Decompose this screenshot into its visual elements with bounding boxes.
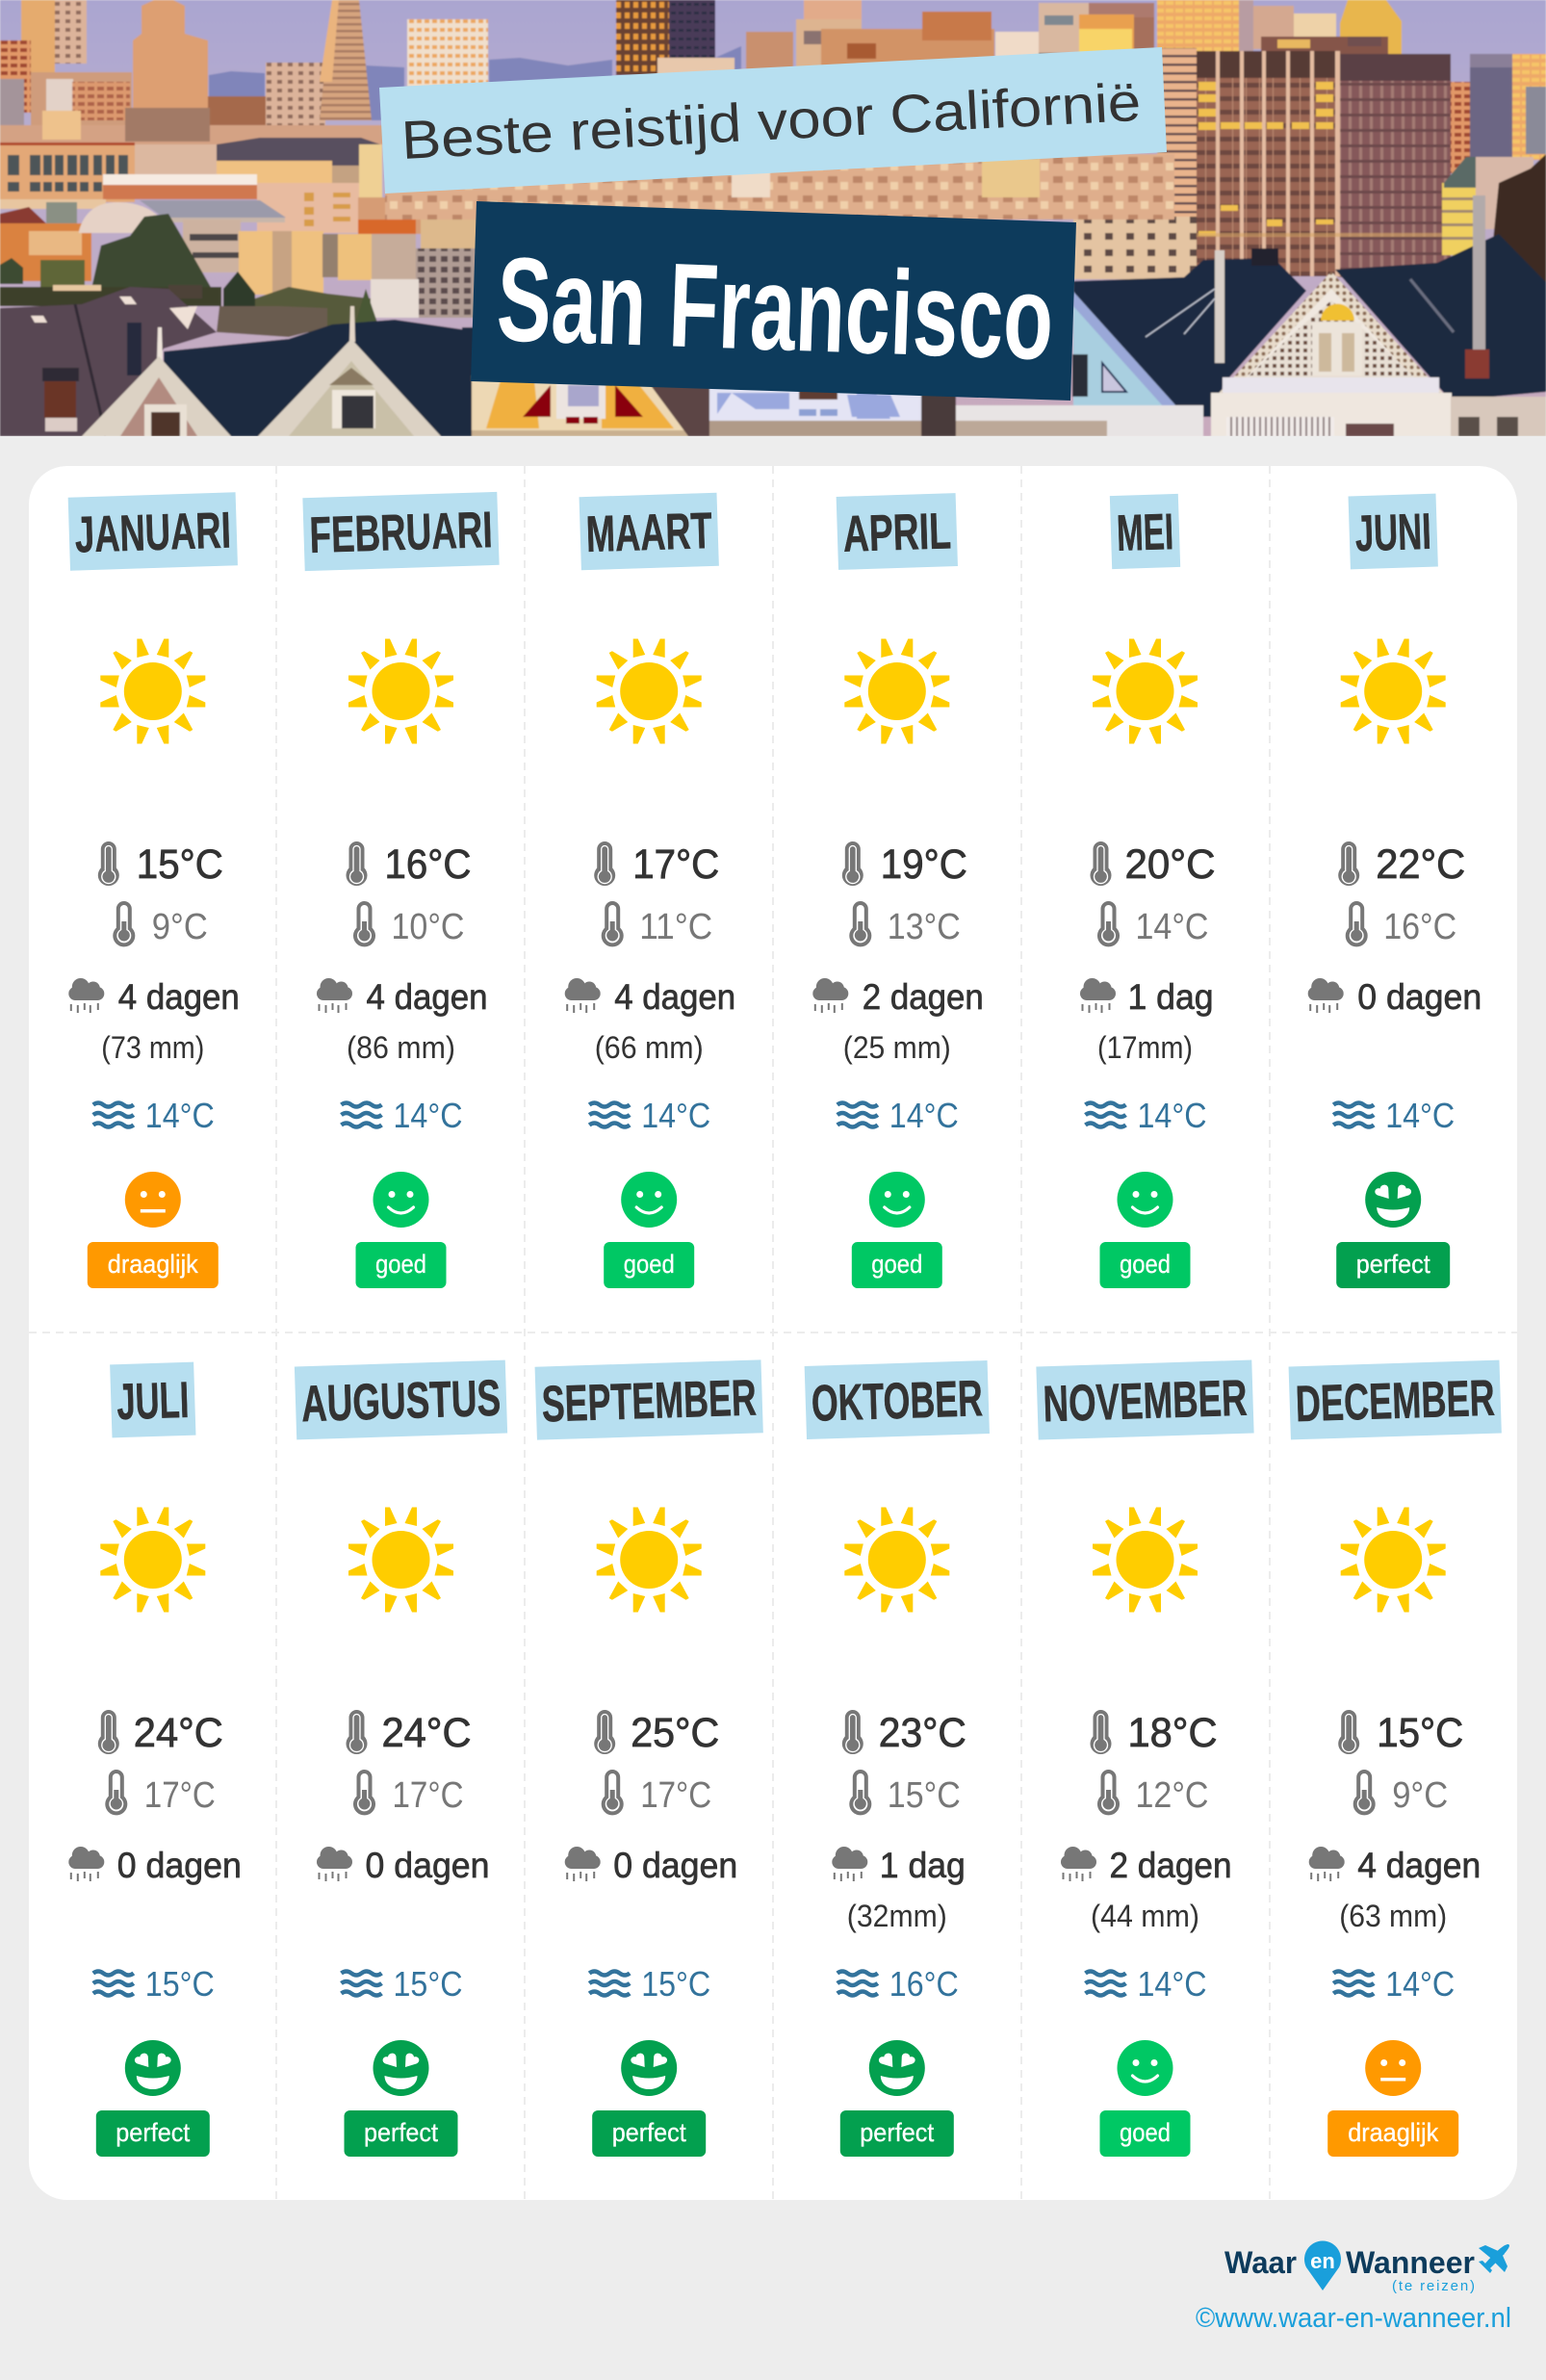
min temperature: 13°C xyxy=(888,907,961,947)
icon: waves xyxy=(837,1103,878,1126)
sea temperature: 14°C xyxy=(1138,1096,1207,1135)
month heading xyxy=(1110,494,1180,569)
month heading: APRIL xyxy=(842,503,952,563)
rainfall: (66 mm) xyxy=(595,1030,704,1065)
month heading xyxy=(535,1359,763,1440)
sea temperature: 14°C xyxy=(1385,1964,1455,2004)
panel: december xyxy=(1289,1360,1502,2157)
rain days: 4 dagen xyxy=(366,977,487,1017)
rating badge xyxy=(852,1242,942,1288)
max temperature: 16°C xyxy=(385,841,472,888)
sea temperature: 15°C xyxy=(145,1964,215,2004)
max temperature: 15°C xyxy=(1377,1710,1463,1756)
month heading xyxy=(580,493,719,570)
icon: heart-eyes face xyxy=(374,2040,429,2096)
icon: sun xyxy=(1093,1508,1198,1612)
rainfall: (17mm) xyxy=(1097,1030,1193,1065)
icon: thermometer max xyxy=(1338,841,1359,886)
month heading xyxy=(1036,1360,1254,1439)
icon: thermometer min xyxy=(1099,1772,1118,1813)
icon: smiling face xyxy=(869,1172,925,1228)
logo: Waar en Wanneer: (te reizen) xyxy=(1392,2278,1475,2294)
icon: smiling face xyxy=(621,1172,677,1228)
icon: map pin: en xyxy=(1310,2249,1335,2273)
min temperature: 15°C xyxy=(888,1775,961,1816)
sea temperature: 15°C xyxy=(641,1964,710,2004)
title banner: San Francisco xyxy=(495,233,1056,385)
icon: thermometer min xyxy=(604,1772,622,1813)
rain days: 1 dag xyxy=(1128,977,1213,1017)
max temperature: 19°C xyxy=(881,841,967,888)
month heading: SEPTEMBER xyxy=(541,1370,758,1433)
month heading xyxy=(805,1360,990,1439)
icon: rain xyxy=(317,1847,352,1881)
copyright: ©www.waar-en-wanneer.nl xyxy=(1196,2303,1511,2334)
icon: thermometer max xyxy=(98,841,119,886)
min temperature: 10°C xyxy=(391,907,464,947)
min temperature: 11°C xyxy=(639,907,712,947)
rain days: 4 dagen xyxy=(614,977,735,1017)
min temperature: 17°C xyxy=(144,1775,216,1816)
rainfall: (63 mm) xyxy=(1339,1899,1447,1933)
rating badge: perfect xyxy=(612,2118,686,2147)
icon: waves xyxy=(341,1103,381,1126)
max temperature: 23°C xyxy=(879,1710,966,1756)
icon: waves xyxy=(1333,1103,1374,1126)
icon: sun xyxy=(597,1508,702,1612)
rating badge: goed xyxy=(375,1250,426,1279)
panel: maart xyxy=(565,493,735,1288)
rainfall: (32mm) xyxy=(847,1899,947,1933)
rating badge: perfect xyxy=(860,2118,935,2147)
icon: smiling face xyxy=(374,1172,429,1228)
icon: waves xyxy=(1086,1103,1126,1126)
month heading: NOVEMBER xyxy=(1043,1370,1248,1433)
sea temperature: 14°C xyxy=(889,1096,959,1135)
rating badge: goed xyxy=(1120,2118,1171,2147)
sea temperature: 14°C xyxy=(641,1096,710,1135)
month heading: MEI xyxy=(1116,504,1174,562)
icon: thermometer min xyxy=(355,903,374,944)
icon: heart-eyes face xyxy=(621,2040,677,2096)
rating badge: goed xyxy=(1120,1250,1171,1279)
month heading: FEBRUARI xyxy=(309,502,493,564)
panel: climate calendar xyxy=(29,466,1517,2200)
max temperature: 20°C xyxy=(1124,841,1215,888)
icon: neutral face xyxy=(1365,2040,1421,2096)
month heading xyxy=(1349,494,1438,569)
min temperature: 9°C xyxy=(1392,1775,1448,1816)
logo: Waar en Wanneer: Wanneer xyxy=(1346,2245,1475,2280)
rain days: 0 dagen xyxy=(613,1846,737,1885)
icon: waves xyxy=(93,1972,134,1995)
rating badge: perfect xyxy=(116,2118,191,2147)
icon: sun xyxy=(597,639,702,743)
panel: januari xyxy=(68,492,240,1288)
rating badge xyxy=(345,2110,458,2157)
rating badge: goed xyxy=(871,1250,922,1279)
panel: september xyxy=(535,1359,763,2157)
month heading xyxy=(110,1362,195,1437)
rating badge: goed xyxy=(624,1250,675,1279)
min temperature: 9°C xyxy=(152,907,208,947)
icon: thermometer max xyxy=(594,1710,615,1754)
icon: sun xyxy=(844,639,949,743)
icon: heart-eyes face xyxy=(1365,1172,1421,1228)
icon: waves xyxy=(589,1972,630,1995)
month heading xyxy=(295,1360,507,1439)
rating badge xyxy=(1327,2110,1458,2157)
icon: thermometer min xyxy=(1348,903,1366,944)
icon: thermometer min xyxy=(851,1772,869,1813)
icon: thermometer max xyxy=(1090,1710,1111,1754)
rain days: 4 dagen xyxy=(1357,1846,1481,1885)
icon: sun xyxy=(100,639,205,743)
icon: thermometer min xyxy=(1355,1772,1374,1813)
rain days: 4 dagen xyxy=(118,977,240,1017)
rating badge xyxy=(1099,1242,1190,1288)
min temperature: 16°C xyxy=(1383,907,1456,947)
rainfall: (73 mm) xyxy=(101,1030,204,1065)
rating badge xyxy=(604,1242,694,1288)
min temperature: 17°C xyxy=(640,1775,711,1816)
rating badge xyxy=(96,2110,210,2157)
rating badge: perfect xyxy=(1356,1250,1430,1279)
max temperature: 24°C xyxy=(381,1710,472,1756)
icon: thermometer max xyxy=(1338,1710,1359,1754)
month heading xyxy=(302,492,500,571)
icon: smiling face xyxy=(1117,1172,1172,1228)
panel: mei xyxy=(1080,494,1215,1288)
icon: thermometer min xyxy=(107,1772,125,1813)
icon: smiling face xyxy=(1117,2040,1172,2096)
logo: Waar en Wanneer: Waar xyxy=(1224,2245,1297,2280)
sea temperature: 14°C xyxy=(1138,1964,1207,2004)
month heading xyxy=(837,493,958,570)
icon: sun xyxy=(100,1508,205,1612)
month heading: JULI xyxy=(116,1372,190,1431)
subtitle banner: Beste reistijd voor Californië xyxy=(399,71,1143,170)
rain days: 2 dagen xyxy=(1109,1846,1232,1885)
max temperature: 17°C xyxy=(632,841,719,888)
icon: sun xyxy=(1341,1508,1446,1612)
max temperature: 15°C xyxy=(137,841,223,888)
sea temperature: 14°C xyxy=(393,1096,462,1135)
rain days: 0 dagen xyxy=(1357,977,1482,1017)
icon: sun xyxy=(1093,639,1198,743)
month heading xyxy=(68,492,238,571)
rating badge: draaglijk xyxy=(1348,2118,1439,2147)
panel: juli xyxy=(68,1362,242,2157)
icon: waves xyxy=(589,1103,630,1126)
rainfall: (44 mm) xyxy=(1091,1899,1199,1933)
month heading xyxy=(1289,1360,1502,1439)
icon: thermometer min xyxy=(851,903,869,944)
icon: waves xyxy=(93,1103,134,1126)
icon: rain xyxy=(317,978,352,1013)
icon: waves xyxy=(341,1972,381,1995)
icon: sun xyxy=(1341,639,1446,743)
panel: april xyxy=(812,493,984,1288)
icon: thermometer min xyxy=(1099,903,1118,944)
panel: februari xyxy=(302,492,500,1288)
icon: rain xyxy=(812,978,848,1013)
icon: thermometer min xyxy=(355,1772,374,1813)
panel: juni xyxy=(1308,494,1482,1288)
icon: rain xyxy=(68,978,104,1013)
icon: thermometer max xyxy=(347,1710,368,1754)
subtitle banner xyxy=(379,47,1167,194)
icon: rain xyxy=(1309,1847,1345,1881)
icon: thermometer max xyxy=(842,841,863,886)
icon: thermometer max xyxy=(347,841,368,886)
title banner xyxy=(471,201,1076,401)
rain days: 2 dagen xyxy=(863,977,984,1017)
panel: oktober xyxy=(805,1360,990,2157)
max temperature: 18°C xyxy=(1128,1710,1217,1756)
icon: rain xyxy=(832,1847,867,1881)
icon: waves xyxy=(1086,1972,1126,1995)
rating badge: perfect xyxy=(364,2118,438,2147)
icon: neutral face xyxy=(125,1172,181,1228)
rainfall: (25 mm) xyxy=(843,1030,951,1065)
rain days: 0 dagen xyxy=(117,1846,242,1885)
max temperature: 22°C xyxy=(1376,841,1465,888)
month heading: JUNI xyxy=(1354,504,1432,562)
min temperature: 12°C xyxy=(1136,1775,1209,1816)
rain days: 0 dagen xyxy=(366,1846,489,1885)
icon: waves xyxy=(1333,1972,1374,1995)
icon: map pin xyxy=(1304,2241,1341,2290)
rating badge xyxy=(1336,1242,1450,1288)
max temperature: 25°C xyxy=(631,1710,719,1756)
min temperature: 14°C xyxy=(1136,907,1209,947)
icon: thermometer max xyxy=(1090,841,1111,886)
header photo: San Francisco skyline xyxy=(0,0,1546,436)
rainfall: (86 mm) xyxy=(347,1030,455,1065)
icon: thermometer min xyxy=(115,903,133,944)
icon: thermometer max xyxy=(842,1710,863,1754)
rating badge xyxy=(356,1242,447,1288)
icon: sun xyxy=(348,1508,453,1612)
icon: sun xyxy=(348,639,453,743)
rating badge: draaglijk xyxy=(108,1250,198,1279)
icon: rain xyxy=(565,1847,601,1881)
max temperature: 24°C xyxy=(134,1710,223,1756)
panel: augustus xyxy=(295,1360,507,2157)
panel: november xyxy=(1036,1360,1254,2157)
icon: thermometer max xyxy=(98,1710,119,1754)
icon: heart-eyes face xyxy=(125,2040,181,2096)
icon: heart-eyes face xyxy=(869,2040,925,2096)
icon: airplane xyxy=(1479,2244,1509,2273)
month heading: MAART xyxy=(585,503,713,563)
rating badge xyxy=(1099,2110,1190,2157)
icon: rain xyxy=(68,1847,104,1881)
icon: sun xyxy=(844,1508,949,1612)
sea temperature: 14°C xyxy=(1385,1096,1455,1135)
sea temperature: 15°C xyxy=(393,1964,462,2004)
rating badge xyxy=(592,2110,706,2157)
icon: waves xyxy=(837,1972,878,1995)
rain days: 1 dag xyxy=(880,1846,966,1885)
month heading: AUGUSTUS xyxy=(300,1370,502,1433)
icon: rain xyxy=(1061,1847,1096,1881)
icon: thermometer max xyxy=(594,841,615,886)
month heading: OKTOBER xyxy=(811,1370,984,1433)
icon: rain xyxy=(1308,978,1344,1013)
icon: rain xyxy=(565,978,601,1013)
rating badge xyxy=(88,1242,219,1288)
sea temperature: 14°C xyxy=(145,1096,215,1135)
month heading: JANUARI xyxy=(74,502,232,564)
logo: Waar en Wanneer xyxy=(1224,2241,1509,2294)
icon: rain xyxy=(1080,978,1116,1013)
icon: thermometer min xyxy=(604,903,622,944)
rating badge xyxy=(840,2110,954,2157)
sea temperature: 16°C xyxy=(889,1964,959,2004)
min temperature: 17°C xyxy=(393,1775,464,1816)
